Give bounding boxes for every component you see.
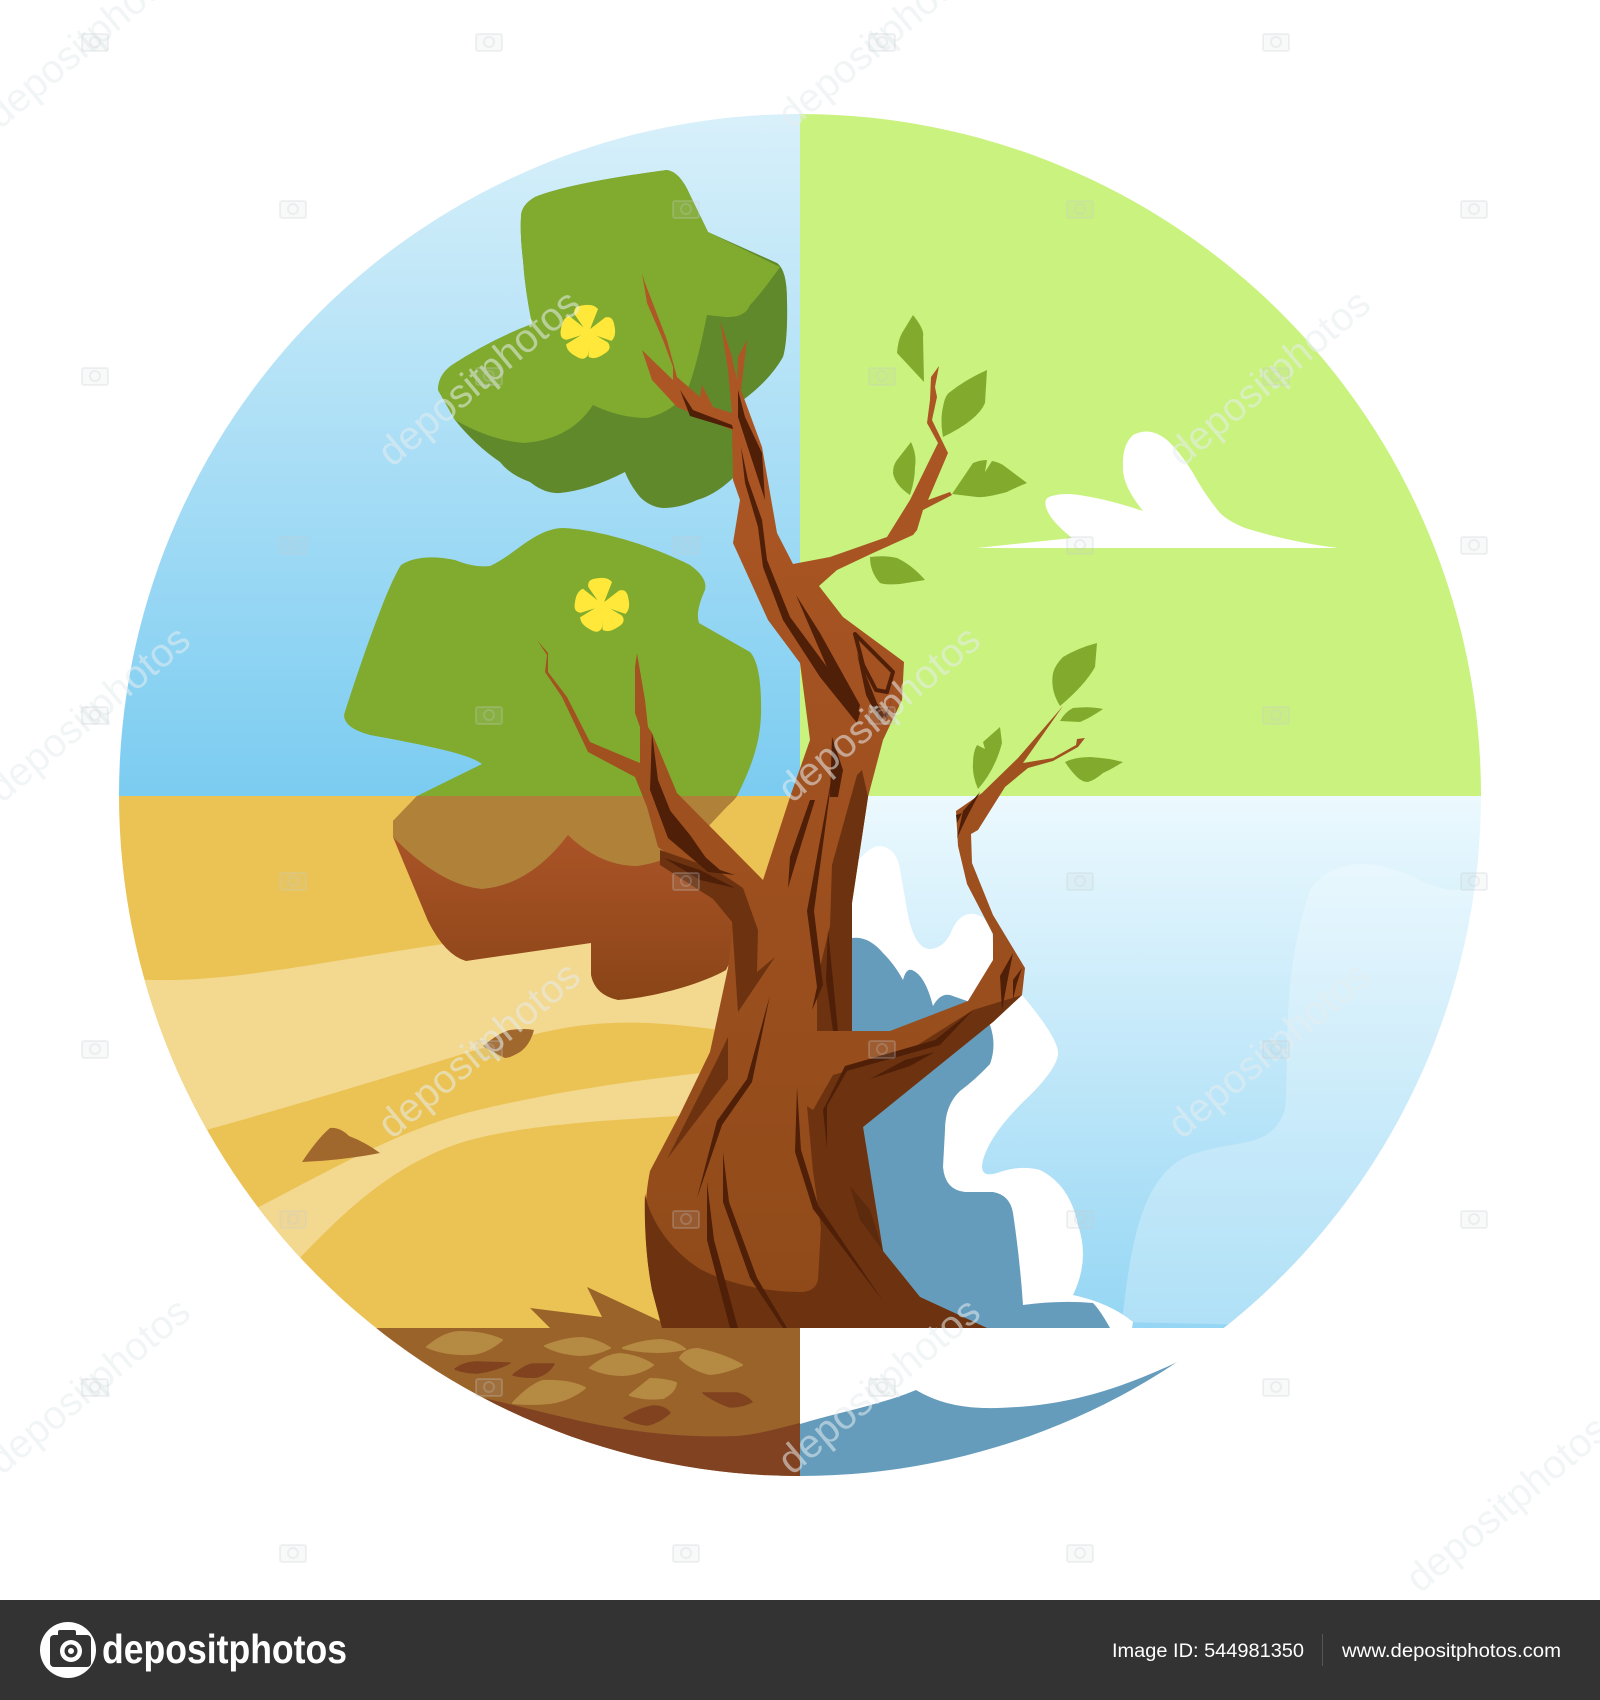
website: www.depositphotos.com	[1341, 1641, 1561, 1662]
snow strip blue crescent	[800, 1362, 1178, 1476]
watermarks: depositphotos	[370, 281, 589, 475]
soil leaves tan	[427, 1332, 742, 1404]
image id: Image ID: 544981350	[1112, 1641, 1304, 1662]
panel: snow strip	[800, 1328, 1482, 1488]
footer bar	[0, 1600, 1600, 1700]
trunk shade limb	[660, 850, 775, 1012]
watermark camera marks	[82, 34, 1487, 1562]
icon: fallen leaf left	[302, 1128, 380, 1162]
top foliage dark side	[438, 170, 787, 508]
divider	[1322, 1634, 1323, 1666]
trunk shade lower left	[667, 1037, 728, 1159]
trunk shade right	[817, 770, 868, 1031]
panel: spring sky	[118, 114, 800, 796]
watermarks: depositphotos	[770, 617, 989, 811]
soil leaves dark	[455, 1362, 752, 1425]
winter pale hill	[1123, 888, 1474, 1324]
trunk silhouette	[537, 273, 1085, 1328]
autumn foliage tan overlay	[393, 796, 737, 889]
circular scene	[118, 114, 1490, 1490]
top foliage light side	[438, 170, 780, 443]
sand band upper	[144, 943, 728, 1130]
trunk knot	[855, 634, 893, 692]
icon: leaves	[870, 315, 1123, 789]
icon: yellow flower lower	[573, 577, 631, 635]
bark cracks	[650, 390, 1022, 1328]
watermarks: depositphotos	[770, 1289, 989, 1483]
foliage top	[438, 170, 787, 508]
soil dark lower band	[484, 1398, 800, 1476]
watermarks: depositphotos	[370, 953, 589, 1147]
foliage lower, autumn section	[344, 528, 761, 1000]
panel: green summer field	[800, 114, 1482, 796]
trunk shade base	[645, 995, 1022, 1328]
sand band lower	[255, 1072, 710, 1260]
lower foliage spring green	[344, 528, 761, 796]
summer cloud	[977, 431, 1338, 548]
panel: soil strip	[376, 1328, 800, 1476]
icon: logo camera	[40, 1622, 96, 1678]
panel: autumn sand	[118, 796, 800, 1328]
grass tuft	[530, 1287, 662, 1328]
snow drift	[845, 846, 1133, 1328]
logo wordmark: depositphotos	[102, 1626, 347, 1672]
winter mountain	[845, 938, 1110, 1328]
tree trunk	[537, 273, 1085, 1328]
icon: fallen leaf middle	[483, 1029, 534, 1058]
autumn foliage brown	[393, 796, 760, 1000]
panel: winter sky	[800, 796, 1482, 1328]
watermarks: depositphotos	[1160, 281, 1379, 475]
icon: yellow flower top	[559, 304, 617, 362]
watermarks: depositphotos	[1160, 953, 1379, 1147]
